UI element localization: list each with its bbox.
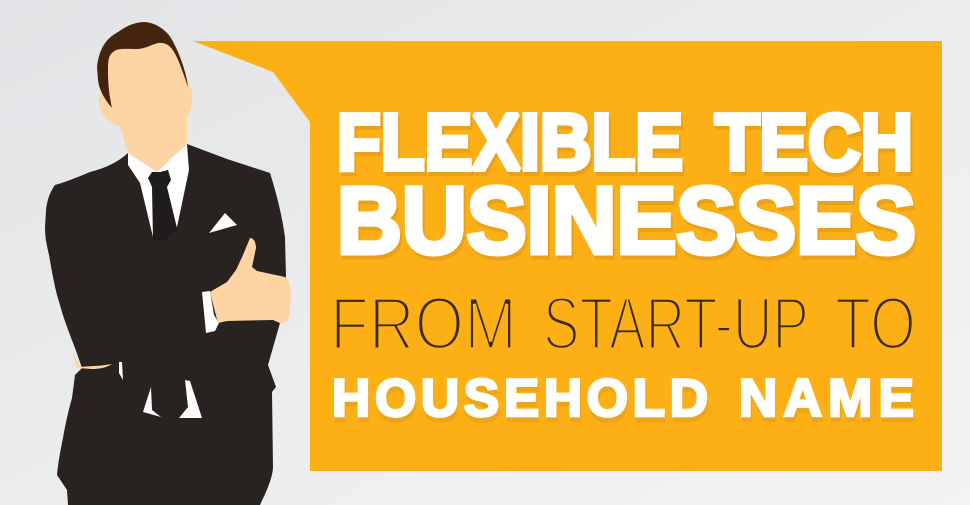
word: start-up: START-UP	[543, 282, 809, 365]
word: name: NAME	[739, 369, 916, 428]
left hand fingers	[73, 352, 112, 369]
man's face and neck	[99, 42, 192, 174]
shirt gap right	[179, 380, 202, 418]
tie	[148, 170, 177, 240]
thumbs-up hand	[210, 238, 291, 324]
word: from: FROM	[330, 282, 517, 365]
headline: flexible tech businesses	[337, 98, 916, 274]
pocket square	[209, 213, 237, 233]
man's hair	[97, 22, 188, 108]
headline: household name	[332, 369, 916, 428]
word: household: HOUSEHOLD	[332, 369, 710, 428]
word: tech: TECH	[715, 98, 913, 186]
shirt gap left	[143, 387, 161, 417]
suit jacket and trousers	[45, 144, 286, 505]
shirt collar	[128, 144, 189, 237]
word: flexible: FLEXIBLE	[337, 98, 683, 186]
subtitle: from start-up to	[330, 282, 916, 365]
speech bubble panel	[193, 41, 942, 471]
shirt glimpse at waist	[119, 362, 123, 380]
word: businesses: BUSINESSES	[337, 168, 916, 274]
shirt cuff	[202, 291, 219, 333]
word: to: TO	[835, 282, 916, 365]
illustration: businessman	[45, 22, 291, 505]
